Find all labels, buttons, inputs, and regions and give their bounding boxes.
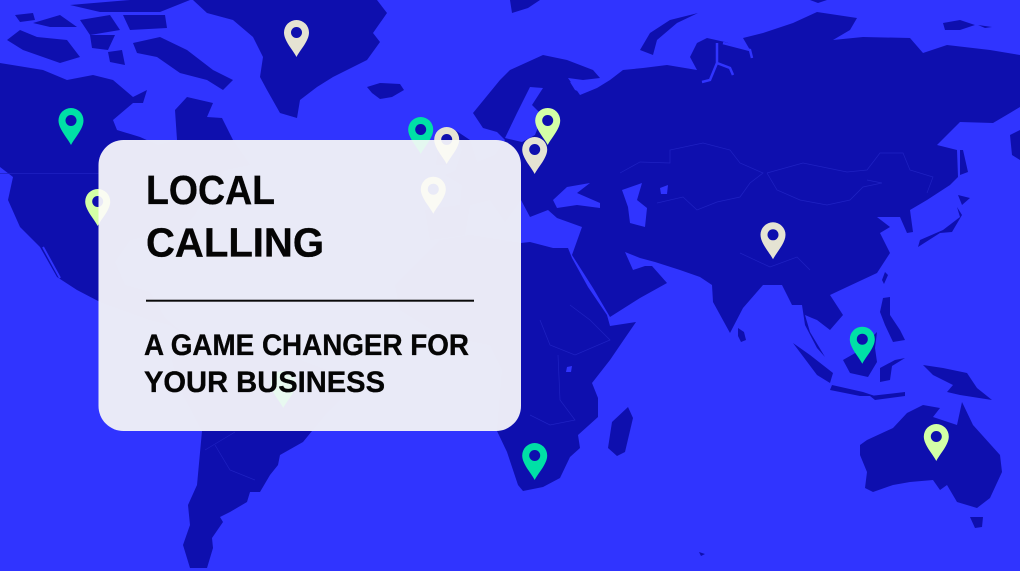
pin hole: Australia lime — [931, 431, 942, 442]
Iceland — [367, 83, 404, 99]
title — [146, 167, 324, 266]
subtitle — [144, 329, 469, 399]
South America — [172, 330, 345, 568]
pin: Greenland — [284, 20, 309, 57]
country borders — [0, 143, 933, 480]
ghost pin: United States — [98, 189, 110, 224]
pin: Australia lime — [924, 424, 949, 461]
Britain and Ireland — [436, 130, 478, 172]
location pins — [58, 20, 949, 480]
subtitle: YOUR BUSINESS — [144, 366, 385, 399]
pin: North America green — [58, 108, 84, 145]
pin hole: Poland beige — [529, 144, 540, 155]
Sakhalin and Japan — [918, 150, 970, 247]
Taiwan, Sri Lanka — [738, 272, 888, 342]
pin: Borneo green — [850, 327, 875, 364]
pin hole: Ireland green — [415, 124, 426, 135]
title: LOCAL — [146, 167, 275, 213]
Canadian Arctic islands — [7, 0, 233, 90]
translucent title panel — [98, 140, 521, 431]
pin: Baltic lime — [535, 108, 560, 145]
Madagascar — [608, 407, 633, 456]
pin hole: South Africa green — [529, 450, 540, 461]
subtitle: A GAME CHANGER FOR — [144, 329, 469, 362]
ghost pin: Ireland — [412, 140, 430, 154]
Kamchatka — [1010, 130, 1020, 160]
pin hole: North America green — [66, 115, 76, 126]
inland seas and inlets — [43, 43, 752, 372]
pin hole: Borneo green — [857, 334, 868, 345]
Eurasia — [425, 12, 1020, 357]
Southeast Asia islands — [793, 297, 905, 400]
pins showing through the panel — [98, 140, 459, 408]
pin hole: Baltic lime — [542, 115, 553, 126]
Novaya Zemlya and Arctic islands — [510, 0, 992, 55]
pin hole: Greenland — [291, 27, 302, 38]
Tasmania — [970, 517, 983, 528]
New Guinea — [923, 365, 992, 400]
pin hole: China beige — [768, 229, 778, 240]
pin: United States lime — [85, 189, 110, 226]
ghost pin: United Kingdom — [434, 140, 459, 164]
pin hole: United States lime — [92, 196, 103, 207]
Greenland — [193, 0, 387, 118]
pin hole: United Kingdom beige — [441, 134, 452, 145]
Africa — [395, 235, 636, 491]
ghost pin: Brazil — [271, 371, 296, 408]
divider — [146, 300, 474, 302]
pin: Poland beige — [522, 137, 547, 174]
pin: Ireland green — [408, 117, 433, 154]
pin: United Kingdom beige — [434, 127, 459, 164]
Australia — [860, 402, 1002, 508]
pin: China beige — [760, 222, 786, 259]
Kerguelen — [699, 552, 705, 556]
title: CALLING — [146, 220, 324, 266]
pin: South Africa green — [522, 443, 547, 480]
North America — [0, 63, 250, 335]
ghost pin: Spain — [421, 177, 446, 214]
